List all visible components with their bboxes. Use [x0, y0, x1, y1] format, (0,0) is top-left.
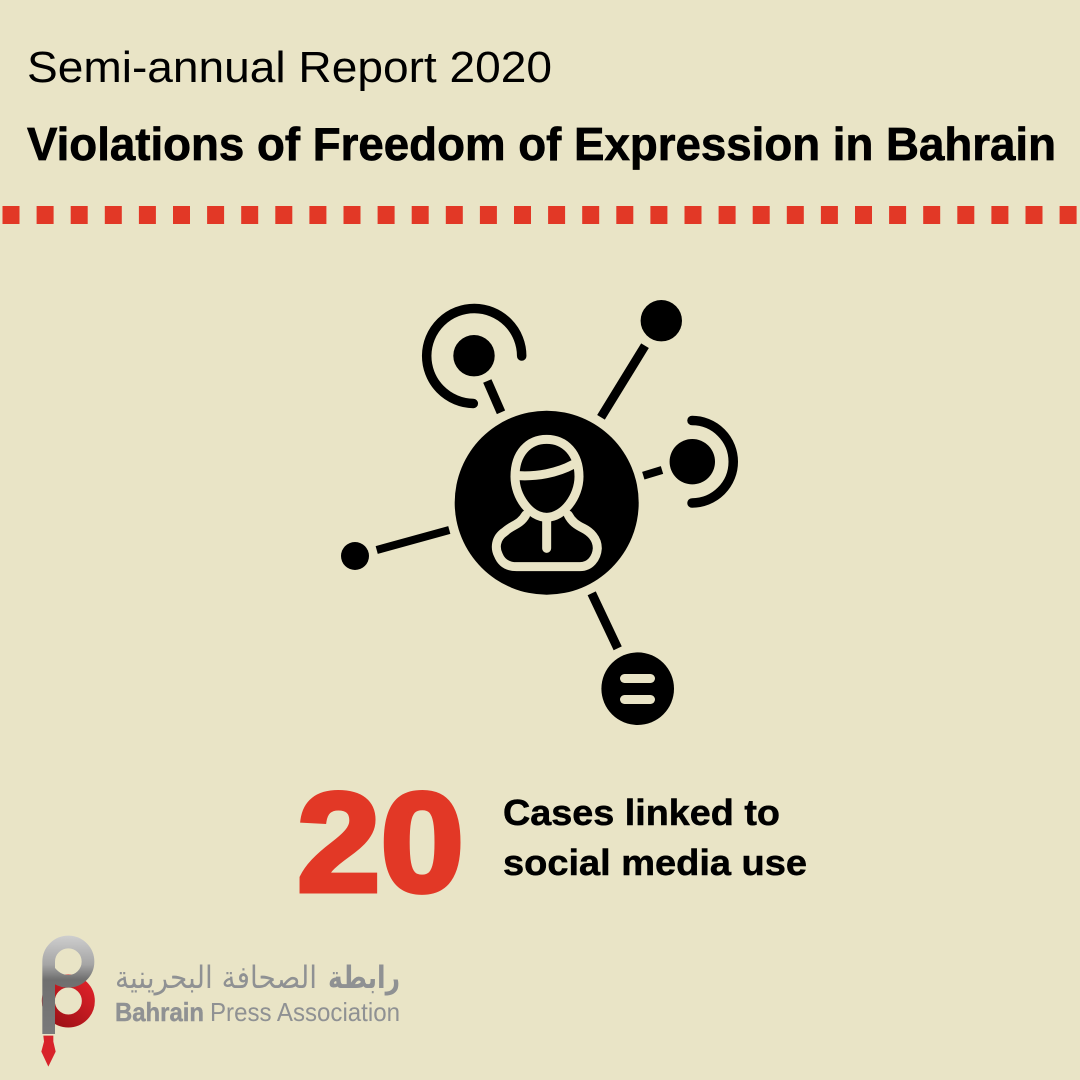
logo text: Arabic name: الصحافة البحرينية	[115, 960, 317, 996]
statistic label: social media use	[503, 842, 807, 883]
node: left	[341, 530, 449, 570]
logo text: English name: Bahrain	[115, 997, 204, 1027]
logo text: English name: Press Association	[210, 997, 400, 1027]
icon: social network around a person	[341, 300, 733, 725]
statistic label	[503, 792, 807, 883]
subtitle: report name: Semi-annual Report 2020	[27, 43, 552, 92]
logo mark: pen-shaped P	[41, 942, 88, 1067]
node: bottom with equals bars	[592, 593, 674, 725]
logo text: English name	[115, 997, 400, 1027]
node: right with arc	[643, 420, 733, 503]
heading: main title: Violations of Freedom of Expression in Bahrain	[27, 118, 1056, 170]
logo: Bahrain Press Association	[41, 942, 400, 1067]
statistic label: Cases linked to	[503, 792, 780, 833]
red dashed divider	[2, 206, 1077, 224]
central circle with person	[455, 411, 639, 595]
logo text: Arabic name: رابطة	[328, 960, 400, 996]
node: top left with arc	[427, 309, 522, 412]
big number: 20: 20	[297, 763, 464, 921]
node: top right	[601, 300, 682, 417]
